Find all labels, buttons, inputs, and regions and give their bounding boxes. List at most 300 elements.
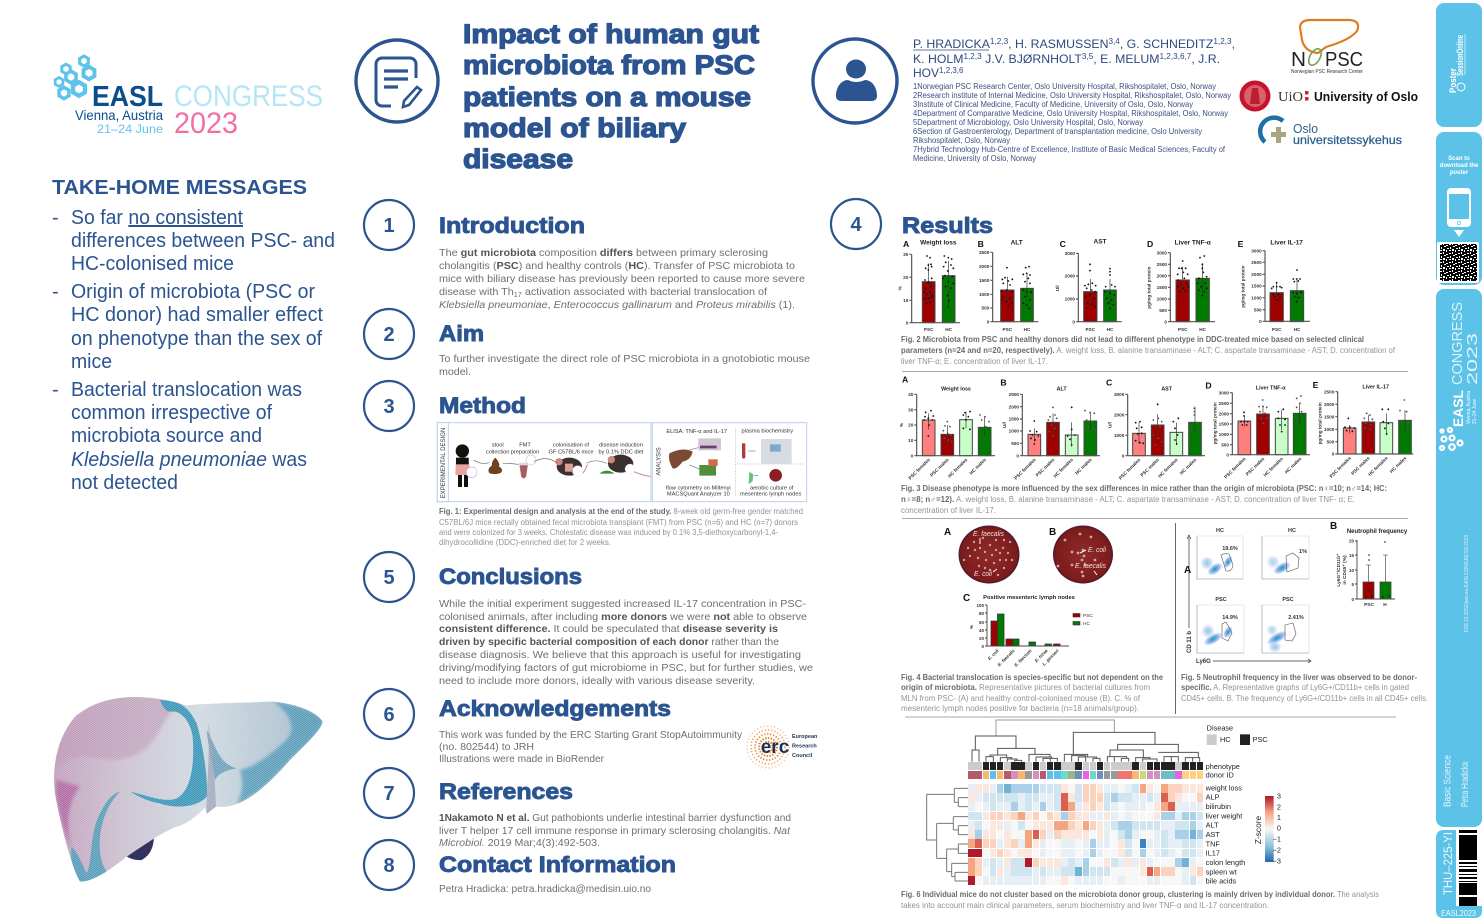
number badge 8 [364,840,414,890]
caption: figure 3 [901,484,1387,515]
number badge 7: 7 [383,783,395,805]
logo: ERC: erc [761,737,790,758]
authors: 3,4 [1108,37,1120,46]
row labels: AST [1206,830,1220,839]
authors: HOV [913,66,939,80]
figure 1: experimental design schematic: flow cytometry on Miltenyi [666,485,731,491]
text: introduction body: disease with Th [439,287,511,298]
arrows between steps [473,447,758,476]
authors: J.V. BJØRNHOLT [982,52,1083,66]
sidebar: EASL congress branding: DOI:10.3252/pso.eu.EASLCONGRESS.2023 [1464,535,1470,632]
caption: figure 5: Fig. 5 Neutrophil frequency in the liver was observed to be donor- [1181,673,1417,682]
chart A weight loss: HC females [947,457,969,479]
chart D TNF [1147,239,1215,332]
caption: figure 4: mesenteric lymph nodes positive for bacteria (n=18 animals/group). [901,704,1139,713]
number badge 5: 5 [383,567,395,589]
sidebar: scan to download: poster [1450,170,1469,176]
caption: figure 6: takes into account main clinical parameters, serum biochemistry and liver TNF-α and IL-17 concentration. [901,901,1269,910]
chart D TNF: 2500 [1219,401,1229,406]
chart B ALT: 0 [987,319,990,324]
affiliations: Medicine, University of Oslo, Norway [913,154,1036,163]
logo: Oslo universitetssykehus [1260,118,1402,147]
chart E IL-17: E [1313,380,1319,390]
chart C lymph nodes: 60 [979,620,984,625]
chart D TNF: 2000 [1157,273,1167,278]
chart D TNF: 2500 [1157,262,1167,267]
caption: figure 2 [901,335,1396,366]
chart C lymph nodes: 0 [981,644,984,649]
chart C lymph nodes [963,593,1093,668]
authors: , [1232,37,1235,51]
chart A weight loss: 0 [906,320,909,325]
icon: stool [489,458,502,474]
legend: z-score colour bar: 0 [1277,823,1281,832]
caption: figure 1: and were colonized for 3 weeks. Cholestatic disease was induced by 0.1% 3,5-diethoxycarbonyl-1,4- [439,528,778,537]
legend: z-score colour bar: 1 [1277,813,1281,822]
chart C AST: HC females [1157,457,1179,479]
chart C AST: 1000 [1114,433,1125,438]
caption: figure 1: Fig. 1: Experimental design and analysis at the end of the study. 8-week old germ-free gender matched [439,507,803,516]
figure 1: experimental design schematic: collection [486,449,509,455]
authors: , E. MELUM [1093,52,1159,66]
caption: figure 4: Fig. 4 Bacterial translocation is species-specific but not dependent on the [901,673,1164,682]
row labels [1205,762,1245,886]
flow plots: PSC [1215,597,1227,603]
logo wordmark: 2023 [174,107,238,140]
chart A weight loss: Weight loss [920,240,957,247]
chart B neutrophil frequency: 15 [1349,553,1354,558]
affiliations: 3Institute of Clinical Medicine, Faculty of Medicine, University of Oslo, Oslo, Norway [913,100,1193,109]
chart D TNF: 1500 [1157,285,1167,290]
chart C AST: 2000 [1114,412,1125,417]
number badge 3 [364,381,414,431]
sidebar: poster ID and barcode: THU–225-YI [1441,832,1455,895]
authors: K. HOLM [913,52,962,66]
row labels: liver weight [1206,811,1242,820]
flow plots: 19.6% [1222,546,1238,552]
culture dish B: E. coli [1088,545,1106,554]
legend: z-score colour bar [1253,792,1281,866]
chart A weight loss: 30 [903,252,909,257]
chart C lymph nodes: 100 [976,603,984,608]
text: introduction body: 17 [514,292,522,299]
chart E IL-17: 0 [1259,319,1262,324]
chart A weight loss: A [902,375,909,385]
chart E IL-17: 2500 [1324,389,1335,394]
chart B ALT: 0 [1016,453,1019,458]
authors: P. HRADICKA [913,37,988,51]
figure 1: experimental design schematic: EXPERIMENTAL DESIGN [440,427,447,498]
chart C AST: 1000 [1065,297,1075,302]
sidebar: scan to download: Scan to [1448,156,1470,162]
text: aim body: model. [439,367,471,378]
chart D TNF: 0 [1164,319,1167,324]
chart E IL-17: 2500 [1251,260,1262,265]
text: message list [52,207,335,494]
text: message list: - [52,207,59,229]
chart A weight loss: A [903,239,910,249]
chart D TNF: Liver TNF-α [1256,385,1286,391]
text: message list: mice [71,351,112,373]
logo: NoPSC [1291,20,1363,75]
chart C AST: PSC females [1118,457,1142,481]
chart B ALT: 2500 [979,250,990,255]
panel: take-home messages [52,177,335,494]
chart C AST [1106,377,1205,481]
text: acknowledgements body [439,730,743,765]
icon: document in circle [356,40,438,122]
affiliations: 1Norwegian PSC Research Center, Oslo University Hospital, Rikshospitalet, Oslo, Norway [913,82,1216,91]
caption: figure 4 [901,673,1164,713]
number badge 2 [364,309,414,359]
chart C lymph nodes: E. faecium [1013,648,1033,668]
chart D TNF [1205,380,1310,480]
chart C lymph nodes: L. gasseri [1041,648,1060,667]
logo wordmark: 21–24 June [97,122,163,136]
text: message list: Origin of microbiota (PSC or [71,281,315,303]
chart D TNF: pg/mg total protein [1213,402,1218,444]
number badge 4: 4 [850,214,862,236]
number badge 4 [831,199,881,249]
figure 2: bar charts PSC vs HC [898,239,1310,332]
affiliations: 5Department of Microbiology, Oslo University Hospital, Oslo, Norway [913,118,1143,127]
number badge 3: 3 [383,396,395,418]
chart A weight loss: % [898,285,903,290]
row labels: IL17 [1206,849,1220,858]
chart A weight loss: 0 [911,453,914,458]
caption: figure 2: Fig. 2 Microbiota from PSC and healthy donors did not lead to different phenotype in DDC-treated mice based on selected clinical [901,335,1364,344]
title [463,19,759,174]
text: reference: liver T helper 17 cell immune response in primary sclerosing cholangitis. Nat [439,826,791,837]
flow plots: Ly6G [1196,659,1211,665]
chart D TNF: pg/mg total protein [1147,266,1152,309]
authors: , J.R. [1191,52,1220,66]
figure 1: experimental design schematic: preparation [511,449,539,455]
title: microbiota from PSC [463,50,755,80]
culture dish B: E. faecalis [1075,561,1106,570]
chart E IL-17: pg/mg total protein [1241,265,1246,308]
logo wordmark: CONGRESS [174,80,323,113]
figure 6: heatmap annotations [926,720,1281,886]
chart B ALT: 1000 [979,292,990,297]
text: introduction body: cholangitis (PSC) and healthy controls ( HC). Transfer of PSC microbiota to [439,261,795,272]
chart C lymph nodes: E. faecalis [997,648,1016,667]
chart C lymph nodes: 80 [979,611,984,616]
logo: ERC: Council [792,753,813,759]
chart D TNF: HC females [1263,456,1284,478]
chart A weight loss: 20 [903,275,909,280]
row labels: bilirubin [1206,802,1231,811]
culture dish B [1049,526,1113,584]
barcode [1456,830,1482,906]
heatmap: phenotype and donor annotation rows [968,762,1203,779]
chart D TNF: Liver TNF-α [1175,239,1211,246]
sidebar: EASL congress branding: Vienna, Austria [1466,390,1472,424]
legend: disease: PSC [1253,735,1268,744]
chart D TNF: HC males [1284,456,1303,475]
sidebar: poster ID and barcode: EASL2023 [1441,909,1476,918]
chart B ALT: 2500 [1009,392,1019,397]
chart B ALT: 1000 [1009,429,1019,434]
logo wordmark: EASL [92,81,163,113]
chart C AST [1055,239,1122,332]
figure 5: neutrophil flow cytometry [1184,521,1408,665]
heading: Method: Method [439,393,526,418]
chart D TNF: 3000 [1219,390,1229,395]
chart B neutrophil frequency: in CD45⁺ (%) [1342,555,1348,585]
text: message list: - [52,379,59,401]
chart C AST: C [1060,239,1067,249]
chart C AST: C [1106,377,1113,387]
chart E IL-17: E [1238,239,1244,249]
chart C AST: PSC males [1139,457,1160,478]
chart C AST: HC [1107,327,1114,332]
chart B ALT: PSC females [1013,457,1037,481]
flow plots [1184,528,1311,665]
text: introduction body: mice with biliary disease has previously been reported to cause more severe [439,274,805,285]
title: patients on a mouse [463,82,751,112]
row labels: bile acids [1206,877,1237,886]
figure 1: experimental design schematic: mesenteric lymph nodes [740,491,801,497]
chart A weight loss [898,239,960,332]
chart C lymph nodes: HC [1083,621,1090,627]
icon: person in circle [813,39,897,123]
chart B ALT [978,239,1038,332]
icon: donor child [455,444,477,487]
chart A weight loss: PSC [924,327,934,332]
sidebar: EASL congress branding: 2023 [1464,333,1481,385]
number badge 1: 1 [383,215,395,237]
figure 1: experimental design schematic: MACSQuant Analyzer 10 [667,491,730,497]
text: message list: differences between PSC- and [71,230,335,252]
figure 1: experimental design schematic: aerobic culture of [750,485,794,491]
chart D TNF: 1000 [1219,432,1229,437]
chart C AST: HC males [1179,457,1198,476]
sidebar: EASL congress branding: EASL [1450,390,1466,427]
flow plots: 2.41% [1288,615,1304,621]
text: introduction body: activation associated with bacterial translocation of [522,287,767,298]
flow plots: A [1184,565,1191,576]
chart B ALT: PSC [1003,327,1013,332]
text: message list: So far no consistent [71,207,243,229]
dendrogram top [972,720,1200,762]
text: message list: Bacterial translocation was [71,379,302,401]
chart C AST: AST [1161,386,1173,392]
sidebar: EASL congress branding: Basic Science [1442,755,1454,807]
chart C AST: AST [1094,239,1107,246]
authors: 1,2,3,6 [939,66,964,75]
sidebar: scan to download: download the [1440,163,1479,169]
caption: figure 1 [439,507,803,547]
authors: 3,5 [1082,52,1094,61]
row labels: ALP [1206,793,1220,802]
authors: 1,2,3 [963,52,982,61]
logo: NoPSC: N [1291,49,1306,71]
chart E IL-17: 1000 [1251,295,1262,300]
text: acknowledgements body: This work was funded by the ERC Starting Grant StopAutoimmunity [439,730,743,741]
illustration: liver [54,697,323,882]
text: message list: Klebsiella pneumoniae was [71,449,307,471]
chart A weight loss: 10 [908,438,914,443]
section 5: conclusions [364,552,813,687]
text: acknowledgements body: Illustrations were made in BioRender [439,754,605,765]
logo: University of Oslo: University of Oslo [1314,89,1418,104]
row labels: colon length [1206,858,1245,867]
title: disease [463,144,573,174]
chart B ALT [1000,377,1100,481]
text: message list: not detected [71,472,178,494]
affiliations: 7Hybrid Technology Hub-Centre of Excellence, Institute of Basic Medical Sciences, Faculty of [913,145,1226,154]
figure 1: experimental design schematic: ELISA: TNF-α and IL-17 [666,429,727,435]
chart C AST: 3000 [1114,392,1125,397]
caption: figure 3: Fig. 3 Disease phenotype is more influenced by the sex differences in mice rather than the origin of microbiota (PSC: n♀=10; n♂=14; HC: [901,484,1387,493]
chart B neutrophil frequency [1330,521,1408,608]
chart A weight loss: PSC females [908,457,931,481]
chart C lymph nodes: E. coli [987,648,1000,661]
heading: Conclusions: Conclusions [439,564,582,589]
figure 4: bacterial translocation [944,526,1113,668]
caption: figure 5: specific. A. Representative graphs of Ly6G+/CD11b+ cells in gated [1181,683,1409,692]
row labels: weight loss [1205,783,1242,792]
legend: z-score colour bar: 3 [1277,792,1281,801]
culture dish A: A [944,527,951,538]
text: message list: HC donor) had smaller effect [71,304,323,326]
chart B ALT: ALT [1057,386,1067,392]
authors: , H. RASMUSSEN [1008,37,1108,51]
chart A weight loss: HC males [968,457,987,476]
section 4: results header [831,199,993,249]
caption: figure 4: origin of microbiota. Representative pictures of bacterial cultures from [901,683,1150,692]
icon: FMT tube [519,455,536,478]
caption: figure 6 [901,890,1379,910]
chart B neutrophil frequency: 0 [1351,597,1354,602]
legend: z-score colour bar: −2 [1273,846,1281,855]
sidebar: EASL congress branding: Petra Hradicka [1460,762,1471,807]
logo: EASL Congress 2023 [55,56,323,140]
authors: 1,2,3 [1213,37,1232,46]
chart B ALT: 500 [982,306,990,311]
chart B neutrophil frequency: 10 [1349,568,1354,573]
sidebar: poster session online: SessionOnline [1455,35,1465,76]
affiliations: 6Section of Gastroenterology, Department of transplantation medicine, Oslo University [913,127,1202,136]
number badge 5 [364,552,414,602]
text: conclusions body: driving/modifying factors of gut microbiome in PSC, but for further studies, we [439,663,813,674]
text: conclusions body: colonised animals, after including more donors we were not able to observe [439,612,807,623]
chart E IL-17: 0 [1332,452,1335,457]
figure 1: experimental design schematic: disease induction [599,443,643,449]
authors [913,37,1235,80]
figure 1: experimental design schematic: stool [492,443,504,449]
chart D TNF: 500 [1159,308,1167,313]
QR code [1437,242,1479,283]
legend: z-score colour bar: −3 [1273,857,1281,866]
chart E IL-17: HC males [1389,455,1408,474]
legend: z-score colour bar: 2 [1277,802,1281,811]
text: message list: common irrespective of [71,402,272,424]
heatmap: z-score cells [968,784,1203,885]
authors: 1,2,3,6,7 [1159,52,1192,61]
chart A weight loss: % [899,422,904,427]
logo wordmark [75,80,323,140]
number badge 8: 8 [383,855,395,877]
chart B ALT: HC females [1053,457,1074,479]
heading: Introduction: Introduction [439,213,585,238]
chart A weight loss: PSC males [929,457,950,478]
text: aim body: To further investigate the direct role of PSC microbiota in a gnotobiotic mouse [439,354,810,365]
culture dish A: E. faecalis [973,529,1004,538]
chart A weight loss [899,375,995,481]
logo: Oslo universitetssykehus: universitetssykehus [1293,133,1402,147]
text: reference: 1Nakamoto N et al. Gut pathobionts underlie intestinal barrier dysfunction and [439,813,791,824]
legend: z-score colour bar: Z-score [1253,816,1263,844]
logo: University of Oslo [1240,80,1418,112]
caption: figure 5 [1181,673,1428,703]
chart C AST: 3000 [1065,251,1075,256]
chart D TNF: PSC males [1245,456,1266,477]
chart B ALT: HC males [1074,457,1093,476]
row labels: phenotype [1206,762,1240,771]
chart C lymph nodes: E. hirae [1034,648,1049,663]
chart C lymph nodes: % [969,625,974,629]
number badge 2: 2 [383,324,395,346]
sidebar: poster session online: Poster [1448,68,1458,93]
chart E IL-17: HC females [1367,455,1389,477]
logo wordmark: Vienna, Austria [75,107,163,123]
text: introduction body: Klebsiella pneumoniae , Enterococcus gallinarum and Proteus mirabilis (1). [439,300,795,311]
chart A weight loss: HC [945,327,953,332]
chart A weight loss: 30 [908,407,914,412]
chart D TNF: 1000 [1157,297,1167,302]
caption: figure 5: CD45+ cells. B. The frequency of Ly6G+/CD11b+ cells in all CD45+ cells. [1181,694,1428,703]
icon: hexagon cells [55,56,94,99]
chart B ALT: 1500 [979,278,990,283]
chart E IL-17: 1500 [1324,414,1335,419]
chart B neutrophil frequency: H [1383,602,1387,608]
chart C lymph nodes: PSC [1083,613,1093,619]
chart B ALT: PSC males [1035,457,1056,478]
row labels: TNF [1206,839,1220,848]
chart A weight loss: 10 [903,298,909,303]
section 8: contact [364,840,676,895]
chart B ALT: 500 [1011,441,1019,446]
row labels: ALT [1206,821,1219,830]
icon: colonised mouse [555,458,587,476]
affiliations: Rikshospitalet, Oslo, Norway [913,136,1010,145]
section 2: aim [364,309,810,378]
text: conclusions body: need to include more donors, ideally with various disease severity. [439,676,755,687]
section 3: method [364,381,807,547]
chart C AST: 0 [1072,319,1075,324]
caption: figure 1: C57BL/6J mice rectally obtained fecal microbiota transplant (FMT) from PSC (n=6) and HC (n=7) donors [439,518,798,527]
figure 1: experimental design schematic: by 0.1% DDC diet [599,449,644,455]
chart D TNF: 500 [1221,442,1229,447]
chart A weight loss: 40 [908,392,914,397]
chart B ALT: 1500 [1009,417,1019,422]
sidebar: poster session online [1436,3,1482,127]
figure 1: experimental design schematic: colonisation of [553,443,590,449]
text: message list: microbiota source and [71,425,262,447]
heading: take-home: TAKE-HOME MESSAGES [52,177,307,199]
chart B neutrophil frequency: B [1330,521,1337,532]
logo: ERC: Research [792,744,817,750]
culture dish B: B [1049,527,1056,538]
chart E IL-17: 1500 [1251,284,1262,289]
legend: disease: HC [1220,735,1231,744]
culture dish A: E. coli [974,569,992,578]
chart D TNF: D [1205,380,1212,390]
logo: NoPSC: PSC [1325,49,1363,71]
chart C AST: 0 [1122,453,1125,458]
